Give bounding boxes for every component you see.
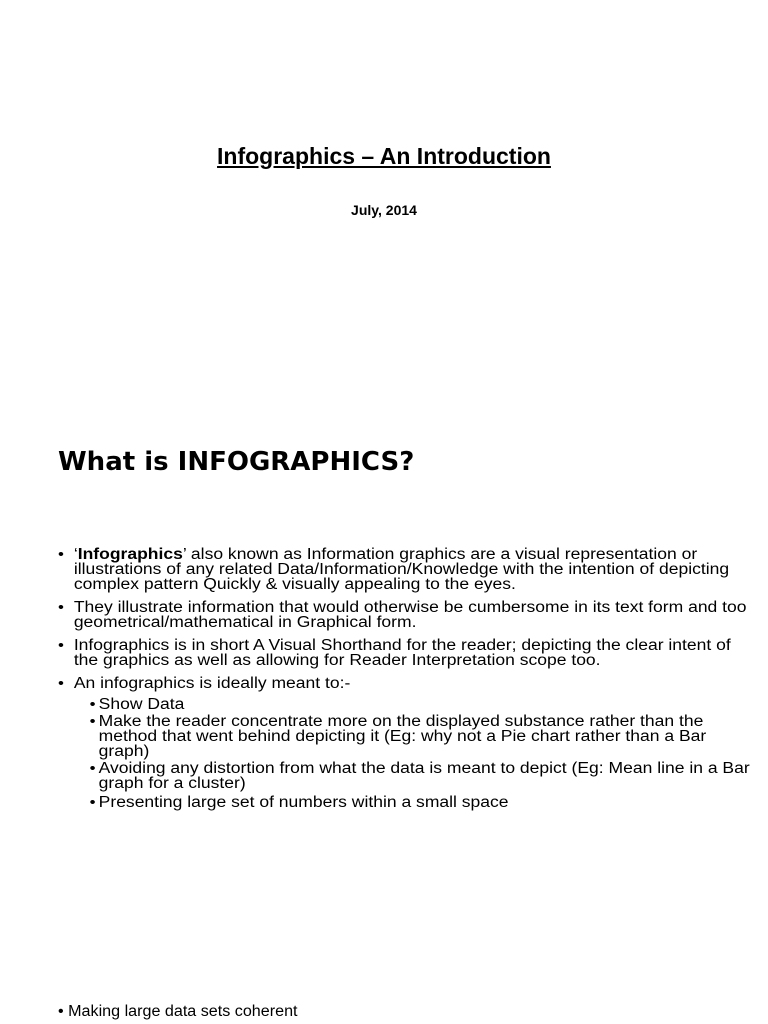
bullet list: • [58, 546, 64, 563]
bullet list: Make the reader concentrate more on the displayed substance rather than the [99, 713, 703, 730]
bullet list: the graphics as well as allowing for Reader Interpretation scope too. [74, 652, 601, 669]
bullet list [58, 546, 750, 811]
bottom bullet: • Making large data sets coherent [58, 1003, 298, 1020]
bullet list: method that went behind depicting it (Eg: why not a Pie chart rather than a Bar [99, 728, 706, 745]
bullet list: illustrations of any related Data/Information/Knowledge with the intention of depicting [74, 561, 729, 578]
bullet list: They illustrate information that would otherwise be cumbersome in its text form and too [74, 599, 747, 616]
bullet list: complex pattern Quickly & visually appealing to the eyes. [74, 576, 516, 593]
bullet list: • [58, 599, 64, 616]
bullet list: • [90, 696, 96, 713]
title: Infographics – An Introduction [217, 143, 551, 169]
bullet list: • [90, 760, 96, 777]
bullet list: Presenting large set of numbers within a small space [99, 794, 509, 811]
bullet list: graph) [99, 743, 149, 760]
bullet list: ‘Infographics’ also known as Information graphics are a visual representation or [74, 546, 697, 563]
bullet list: geometrical/mathematical in Graphical form. [74, 614, 416, 631]
bullet list: • [90, 713, 96, 730]
bullet list: An infographics is ideally meant to:- [74, 675, 350, 692]
bullet list: Avoiding any distortion from what the data is meant to depict (Eg: Mean line in a Bar [99, 760, 750, 777]
bullet list: graph for a cluster) [99, 775, 246, 792]
bullet list: Infographics is in short A Visual Shorthand for the reader; depicting the clear intent of [74, 637, 731, 654]
heading: What is INFOGRAPHICS? [58, 447, 414, 477]
bullet list: • [58, 675, 64, 692]
bullet list: • [90, 794, 96, 811]
bullet list: Show Data [99, 696, 184, 713]
date: July, 2014 [351, 202, 417, 218]
bullet list: • [58, 637, 64, 654]
